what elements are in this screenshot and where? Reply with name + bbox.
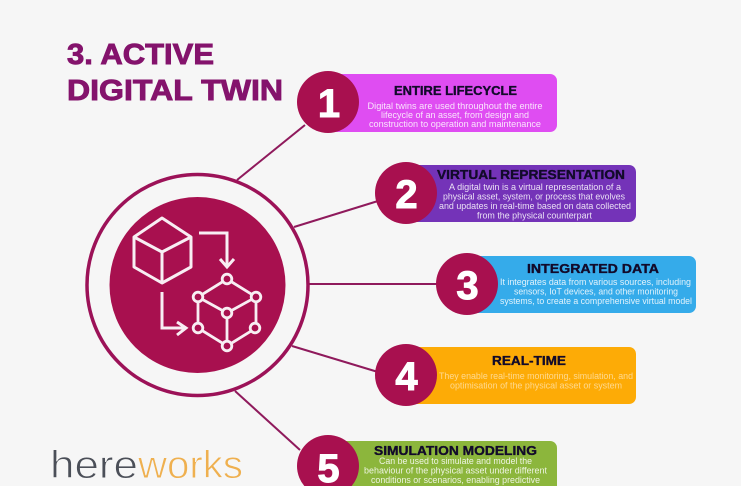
text: integrated data description: It integrates data from various sources, including [500,277,691,287]
text: virtual representation description: from the physical counterpart [477,210,592,220]
text: real-time description: optimisation of the physical asset or system [450,380,622,390]
title [67,39,283,107]
logo: hereworks: here [50,444,138,486]
heading: virtual representation: VIRTUAL REPRESENTATION [437,167,625,182]
icon: wireframe cube [193,274,261,351]
panel: simulation modeling [297,435,557,486]
text: simulation modeling description: conditions or scenarios, enabling predictive [371,475,540,485]
number badge 3 [436,253,498,315]
text: integrated data description: systems, to create a comprehensive virtual model [500,296,692,306]
number badge 3: 3 [456,264,479,308]
number badge 4 [375,344,437,406]
text: entire lifecycle description: construction to operation and maintenance [369,119,541,129]
panel: entire lifecycle [297,71,557,133]
text: entire lifecycle description [368,101,542,129]
panel: integrated data [436,253,696,315]
panel: virtual representation [375,162,636,224]
number badge 5 [297,435,359,486]
text: virtual representation description: A digital twin is a virtual representation of a [449,182,621,192]
text: simulation modeling description [364,456,547,485]
text: virtual representation description: and updates in real-time based on data collected [439,201,631,211]
number badge 1: 1 [318,82,340,126]
connector lines [235,125,438,450]
text: real-time description: They enable real-time monitoring, simulation, and [439,371,633,381]
central circle with digital twin icon [87,174,308,396]
text: entire lifecycle description: lifecycle of an asset, from design and [381,110,529,120]
text: integrated data description [500,277,692,306]
logo: hereworks [50,444,243,486]
number badge 2 [375,162,437,224]
logo: hereworks: works [137,444,243,486]
icon: arrow to wireframe cube [199,233,234,267]
text: real-time description [439,371,633,390]
heading: entire lifecycle: ENTIRE LIFECYCLE [394,83,517,98]
number badge 2: 2 [395,173,418,217]
icon: arrow from cube [162,292,186,335]
panel: real-time [375,344,636,406]
title: 3. ACTIVE [67,39,214,71]
icon: solid cube [134,218,191,283]
text: virtual representation description: physical asset, system, or process that evolves [443,192,625,202]
text: simulation modeling description: Can be used to simulate and model the [379,456,532,466]
text: entire lifecycle description: Digital twins are used throughout the entire [368,101,542,111]
heading: simulation modeling: SIMULATION MODELING [374,443,537,458]
heading: integrated data: INTEGRATED DATA [527,261,660,276]
number badge 1 [297,71,359,133]
number badge 4: 4 [395,355,418,399]
heading: real-time: REAL-TIME [492,353,566,368]
text: simulation modeling description: behaviour of the physical asset under different [364,466,547,476]
text: virtual representation description [439,182,631,220]
text: integrated data description: sensors, IoT devices, and other monitoring [514,286,678,296]
title: DIGITAL TWIN [67,75,283,107]
